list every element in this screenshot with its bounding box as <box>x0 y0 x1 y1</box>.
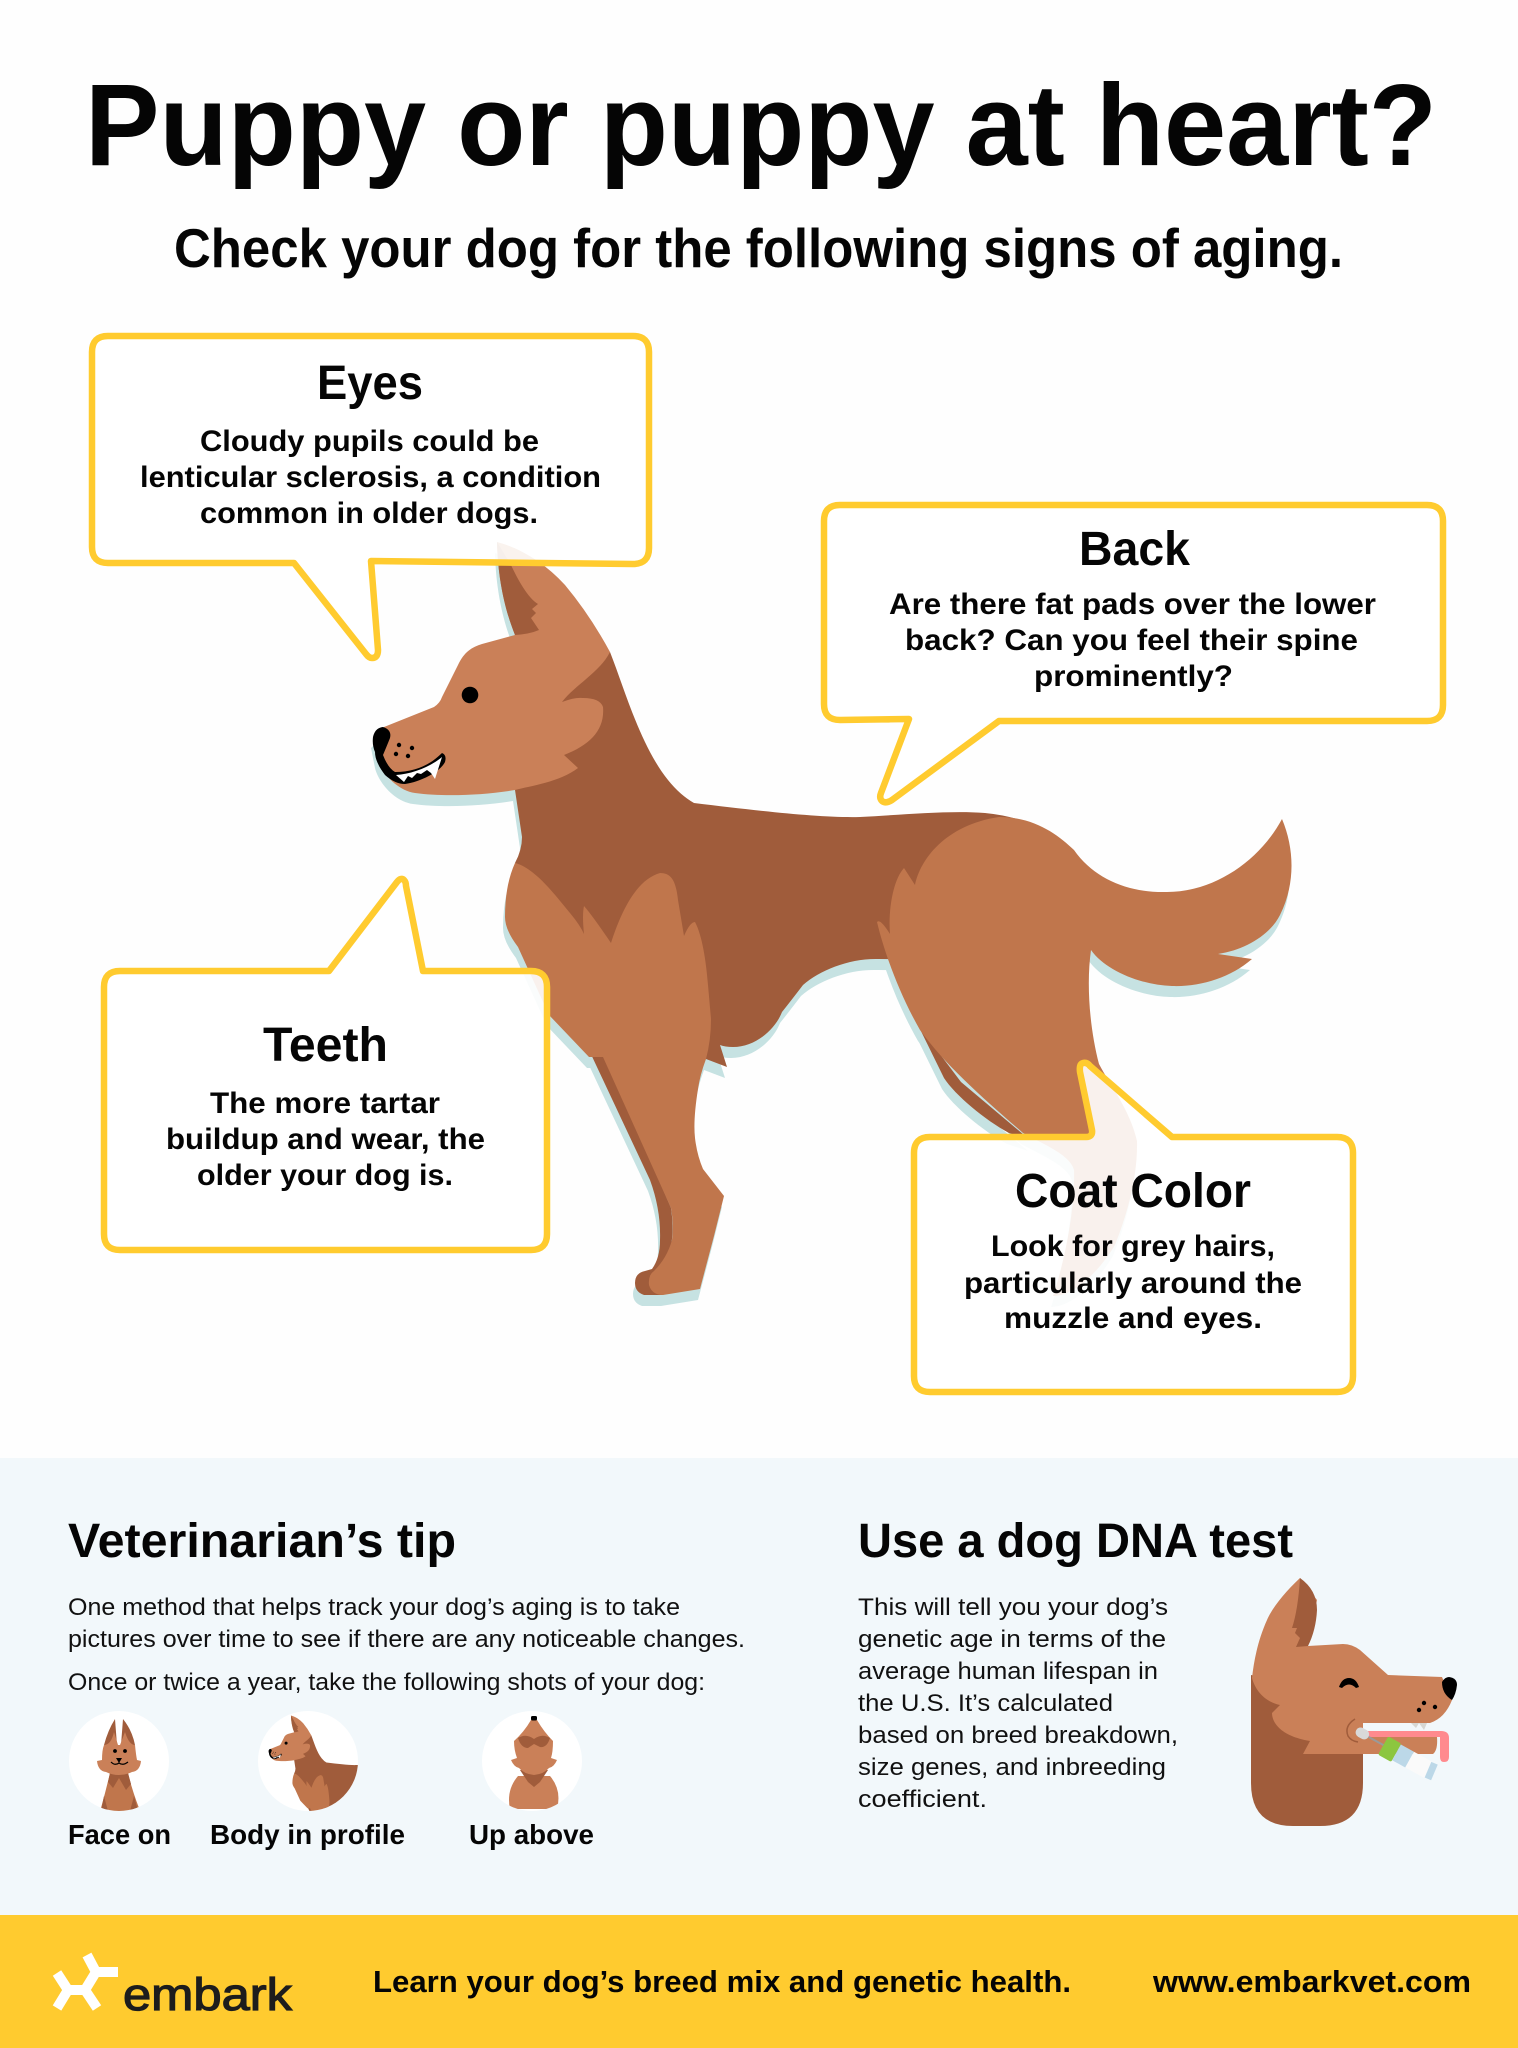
label: face on: Face on <box>68 1819 171 1850</box>
footer website: www.embarkvet.com <box>1152 1964 1471 1999</box>
callout: coat color: Look for grey hairs, <box>991 1230 1275 1263</box>
icon: dog face on <box>69 1711 169 1811</box>
callout: eyes: Cloudy pupils could be <box>200 425 539 458</box>
title: Puppy or puppy at heart? <box>85 60 1437 190</box>
DNA test text <box>858 1594 1178 1813</box>
DNA test text: This will tell you your dog’s <box>858 1594 1168 1621</box>
tip text: One method that helps track your dog’s aging is to take <box>68 1594 680 1621</box>
dog illustration <box>371 542 1292 1307</box>
icon: dog with DNA swab <box>1251 1578 1457 1826</box>
DNA test text: genetic age in terms of the <box>858 1626 1166 1653</box>
callout: teeth <box>104 879 547 1250</box>
heading: use a dog DNA test: Use a dog DNA test <box>858 1515 1293 1568</box>
dog shadow <box>371 553 1290 1307</box>
callout: eyes: Eyes <box>317 357 423 410</box>
callout: back <box>824 505 1443 802</box>
callout: coat color: Coat Color <box>1015 1165 1251 1218</box>
tip text <box>68 1594 745 1696</box>
icon: dog body in profile <box>258 1711 358 1811</box>
heading: veterinarian's tip: Veterinarian’s tip <box>68 1515 456 1568</box>
footer band <box>0 1915 1518 2048</box>
footer tagline: Learn your dog’s breed mix and genetic health. <box>373 1964 1071 1999</box>
panel: veterinarian's tip <box>68 1515 745 1851</box>
subtitle: Check your dog for the following signs of aging. <box>174 217 1343 279</box>
dog front body and head <box>373 542 1020 1295</box>
icon: dog from above <box>482 1711 582 1811</box>
label: up above: Up above <box>469 1819 594 1850</box>
DNA test text: the U.S. It’s calculated <box>858 1690 1113 1717</box>
callout: coat color: particularly around the <box>964 1267 1302 1300</box>
label: body in profile: Body in profile <box>210 1819 405 1850</box>
callout: teeth: buildup and wear, the <box>166 1123 485 1156</box>
callout: teeth: The more tartar <box>210 1087 440 1120</box>
callout: eyes: lenticular sclerosis, a condition <box>140 461 601 494</box>
panel: dog DNA test <box>858 1515 1457 1826</box>
callout: eyes <box>92 336 649 658</box>
panel: tips background <box>0 1458 1518 1915</box>
DNA test text: based on breed breakdown, <box>858 1722 1178 1749</box>
DNA test text: coefficient. <box>858 1786 987 1813</box>
tip text: Once or twice a year, take the following shots of your dog: <box>68 1669 705 1696</box>
DNA test text: average human lifespan in <box>858 1658 1158 1685</box>
callout: back: prominently? <box>1034 660 1233 693</box>
callout: eyes: common in older dogs. <box>200 497 538 530</box>
callout: coat color <box>914 1063 1353 1392</box>
logo: embark: embark <box>123 1969 293 2020</box>
callout: teeth: Teeth <box>263 1019 388 1072</box>
callout: back: back? Can you feel their spine <box>905 624 1358 657</box>
tip text: pictures over time to see if there are any noticeable changes. <box>68 1626 745 1653</box>
callout: teeth: older your dog is. <box>197 1159 453 1192</box>
dog hind leg and tail <box>877 817 1292 1296</box>
DNA test text: size genes, and inbreeding <box>858 1754 1166 1781</box>
callout: back: Back <box>1079 523 1190 576</box>
callout: coat color: muzzle and eyes. <box>1004 1302 1262 1335</box>
logo: embark <box>57 1955 293 2020</box>
callout: back: Are there fat pads over the lower <box>889 588 1376 621</box>
